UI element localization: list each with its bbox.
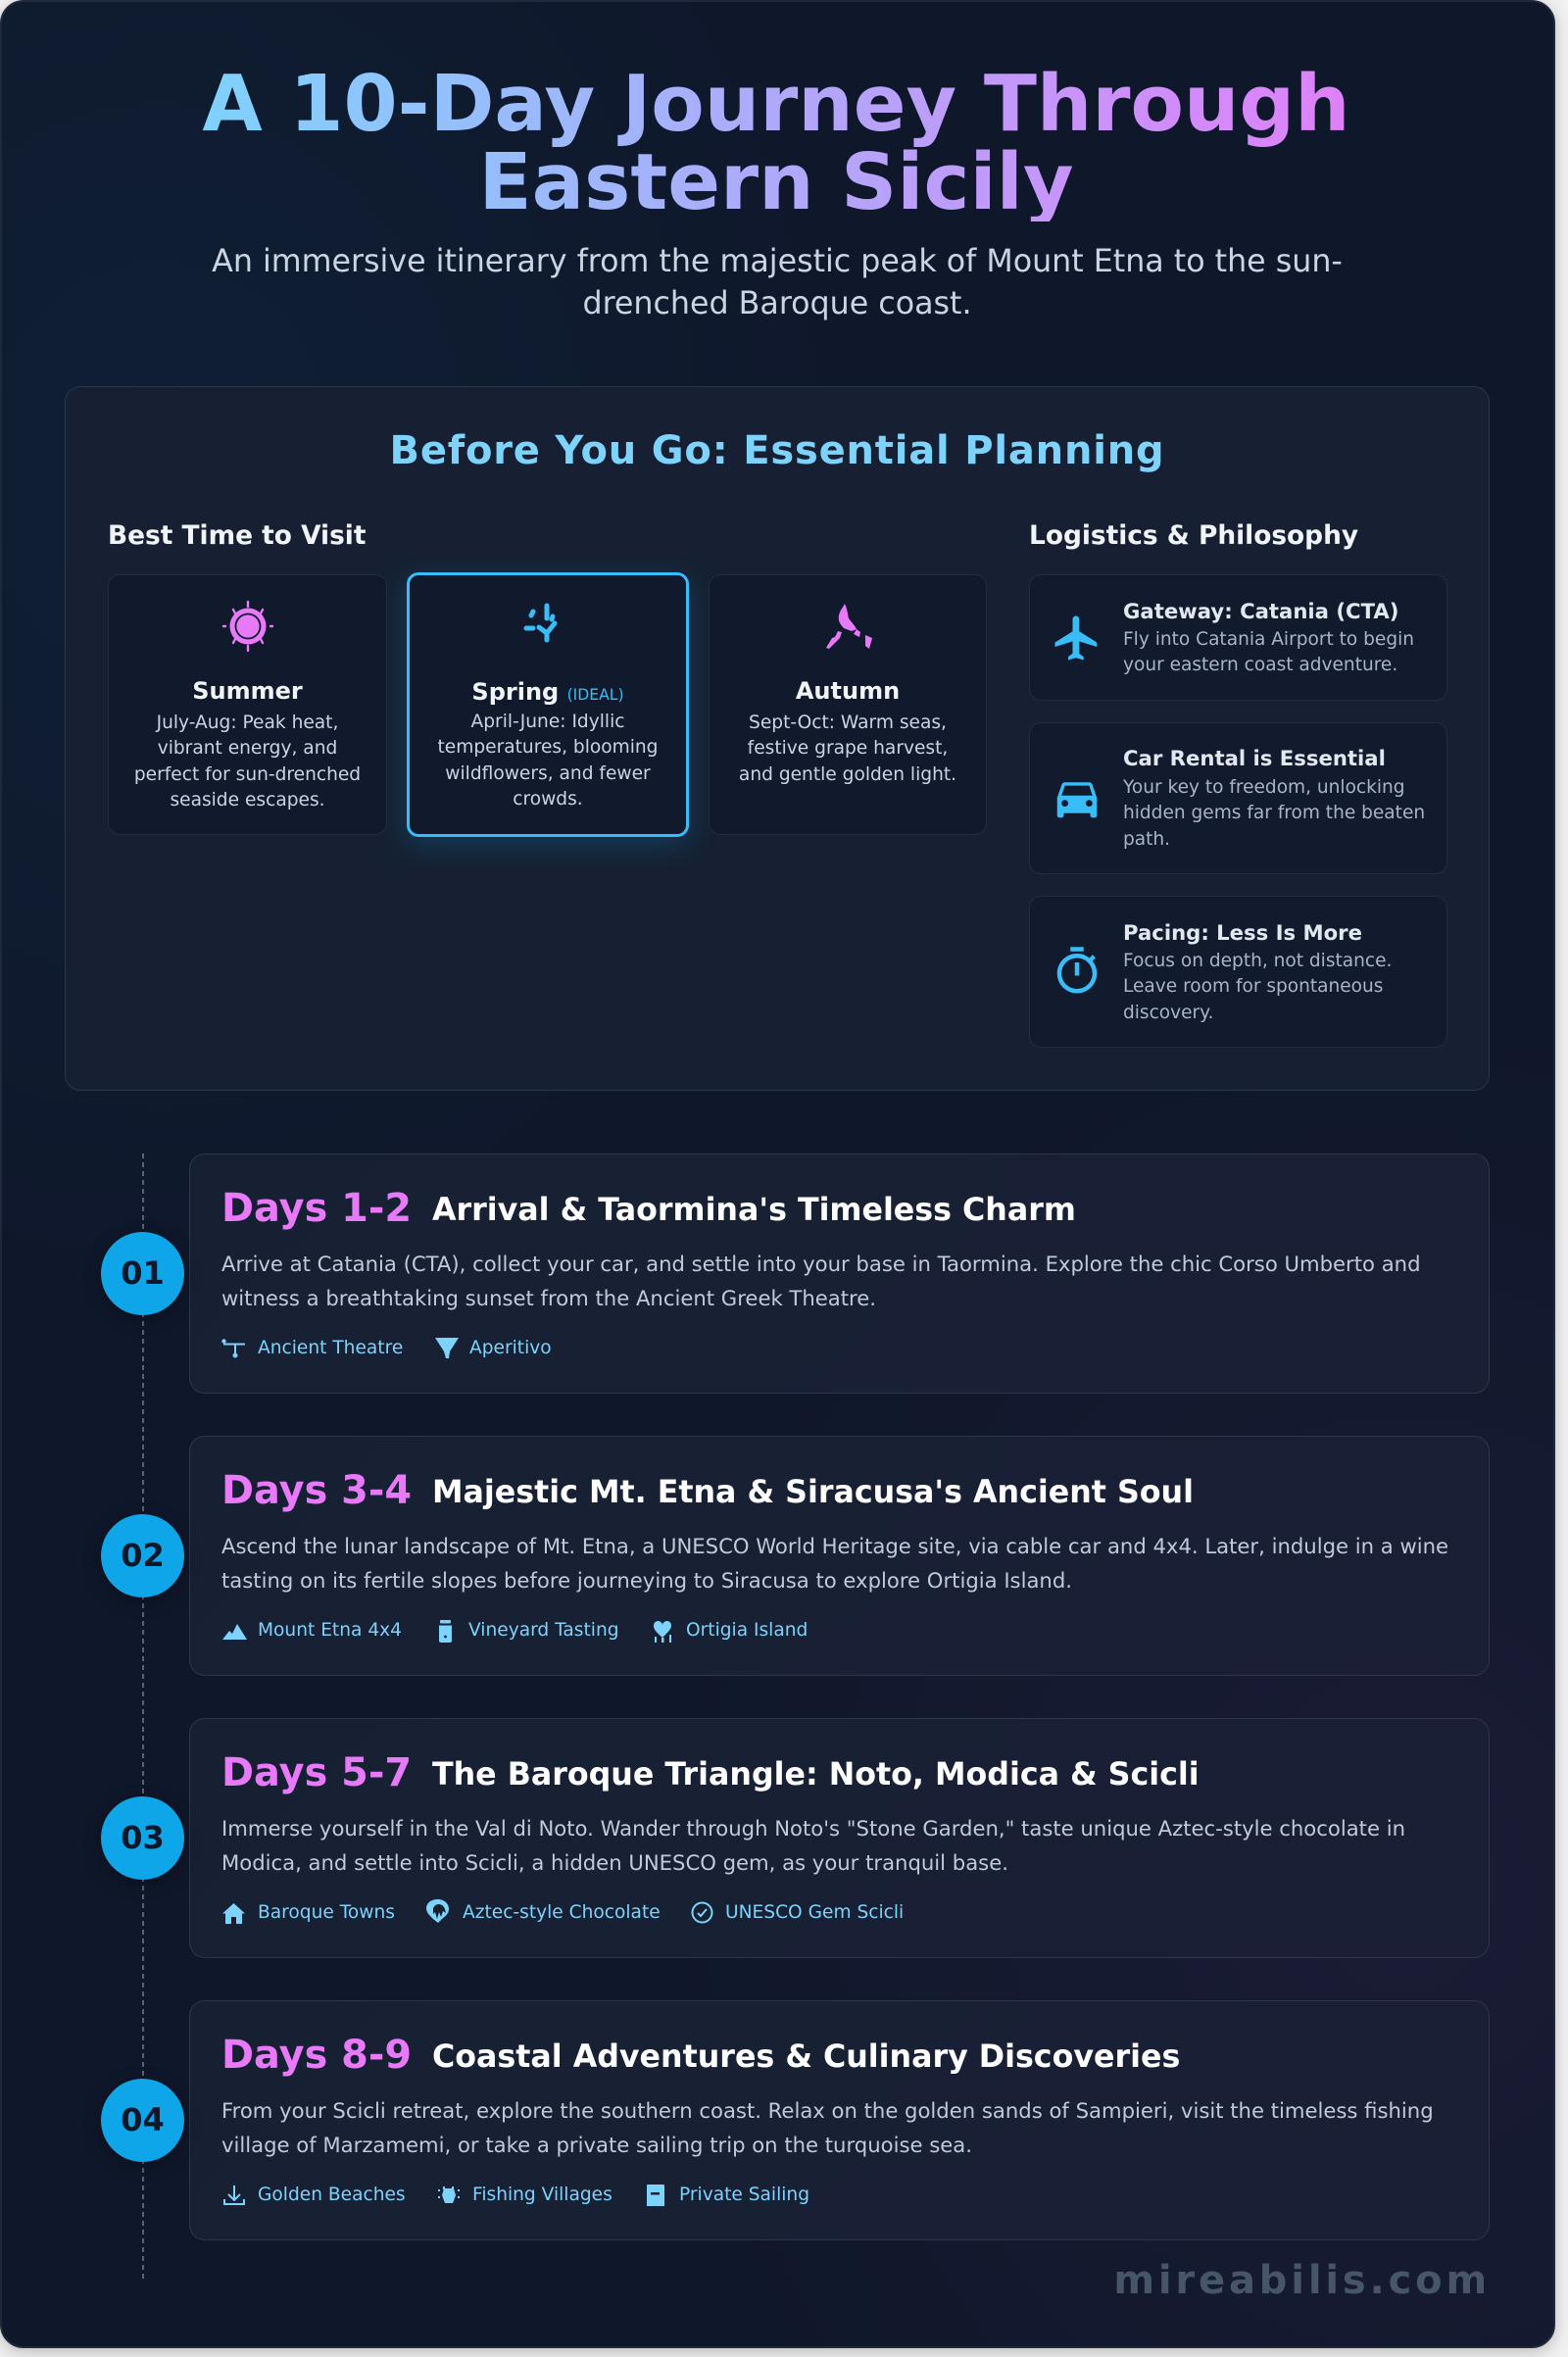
summer text: seaside escapes. xyxy=(170,790,325,810)
days 3-4 label: Days 3-4 xyxy=(221,1468,412,1513)
tag: ortigia island: Ortigia Island xyxy=(686,1620,808,1641)
pacing text: Leave room for spontaneous xyxy=(1123,976,1383,997)
car rental text: hidden gems far from the beaten xyxy=(1123,803,1425,823)
step number 01 xyxy=(101,1232,184,1315)
tag: unesco gem: UNESCO Gem Scicli xyxy=(725,1902,904,1923)
icon: chocolate xyxy=(426,1899,449,1923)
heading: logistics & philosophy: Logistics & Philosophy xyxy=(1029,520,1358,551)
spring text xyxy=(438,712,658,810)
card: pacing xyxy=(1029,896,1447,1048)
icon: bottle xyxy=(439,1620,452,1643)
tag: fishing villages: Fishing Villages xyxy=(472,2185,612,2205)
step number 01: 01 xyxy=(121,1254,165,1292)
icon: download beach xyxy=(223,2185,245,2205)
autumn heading: Autumn xyxy=(796,677,900,705)
tag: private sailing: Private Sailing xyxy=(679,2185,809,2205)
tag: ancient theatre: Ancient Theatre xyxy=(258,1338,403,1358)
panel: days 8-9 xyxy=(189,2000,1490,2240)
step number 03: 03 xyxy=(121,1819,165,1856)
spring text: temperatures, blooming xyxy=(438,737,658,758)
title xyxy=(98,65,1454,221)
days 1-2 text: Arrive at Catania (CTA), collect your car, and settle into your base in Taormina. Explore the chic Corso Umberto and xyxy=(221,1252,1421,1276)
days 1-2 text: witness a breathtaking sunset from the Ancient Greek Theatre. xyxy=(221,1286,876,1310)
summer text: perfect for sun-drenched xyxy=(134,764,361,785)
car rental text xyxy=(1123,777,1425,850)
autumn text: Sept-Oct: Warm seas, xyxy=(749,712,947,733)
icon: theatre xyxy=(221,1339,245,1358)
icon: sprout xyxy=(523,604,557,643)
icon: plane xyxy=(1054,615,1098,661)
icon: house xyxy=(222,1903,245,1924)
summer text xyxy=(134,712,361,810)
heading: best time to visit: Best Time to Visit xyxy=(108,520,366,551)
panel: before you go xyxy=(65,386,1490,1091)
icon: sun xyxy=(221,600,274,653)
tag: mount etna: Mount Etna 4x4 xyxy=(258,1620,402,1641)
autumn text xyxy=(739,712,956,785)
icon: crab xyxy=(438,2186,460,2203)
panel: days 5-7 xyxy=(189,1718,1490,1958)
subtitle: An immersive itinerary from the majestic peak of Mount Etna to the sun- xyxy=(212,244,1343,279)
card: autumn xyxy=(709,574,987,835)
days 1-2 text xyxy=(221,1252,1421,1310)
gateway text: your eastern coast adventure. xyxy=(1123,655,1397,675)
spring text: April-June: Idyllic xyxy=(471,712,624,732)
days 8-9 label: Days 8-9 xyxy=(221,2033,412,2078)
card: gateway xyxy=(1029,574,1447,701)
pacing heading: Pacing: Less Is More xyxy=(1123,920,1362,945)
days 5-7 text: Modica, and settle into Scicli, a hidden UNESCO gem, as your tranquil base. xyxy=(221,1850,1008,1875)
autumn text: and gentle golden light. xyxy=(739,764,956,785)
card: summer xyxy=(108,574,387,835)
car rental text: path. xyxy=(1123,829,1170,850)
gateway text: Fly into Catania Airport to begin xyxy=(1123,629,1414,650)
icon: timer xyxy=(1056,947,1098,994)
panel heading: Before You Go: Essential Planning xyxy=(390,428,1164,473)
tag: baroque towns: Baroque Towns xyxy=(258,1902,395,1923)
icon: heart island xyxy=(654,1621,671,1643)
gateway text xyxy=(1123,629,1414,675)
pacing text: discovery. xyxy=(1123,1003,1213,1023)
days 5-7 title: The Baroque Triangle: Noto, Modica & Scicli xyxy=(432,1757,1200,1792)
gateway heading: Gateway: Catania (CTA) xyxy=(1123,599,1398,623)
subtitle: drenched Baroque coast. xyxy=(582,286,972,321)
icon: check badge xyxy=(692,1901,713,1923)
days 3-4 text xyxy=(221,1534,1448,1593)
days 5-7 text: Immerse yourself in the Val di Noto. Wander through Noto's "Stone Garden," taste unique Aztec-style chocolate in xyxy=(221,1816,1405,1841)
tag: aperitivo: Aperitivo xyxy=(469,1338,552,1358)
days 3-4 text: Ascend the lunar landscape of Mt. Etna, a UNESCO World Heritage site, via cable car and 4x4. Later, indulge in a wine xyxy=(221,1534,1448,1558)
icon: aperitivo xyxy=(435,1338,459,1358)
car rental text: Your key to freedom, unlocking xyxy=(1123,777,1405,798)
panel: days 1-2 xyxy=(189,1154,1490,1394)
days 1-2 label: Days 1-2 xyxy=(221,1186,412,1231)
days 5-7 label: Days 5-7 xyxy=(221,1750,412,1795)
car rental heading: Car Rental is Essential xyxy=(1123,746,1386,770)
spring text: wildflowers, and fewer xyxy=(445,763,651,784)
days 8-9 text: From your Scicli retreat, explore the southern coast. Relax on the golden sands of Sampieri, visit the timeless fishing xyxy=(221,2098,1434,2123)
card: spring (ideal) xyxy=(407,572,689,837)
card: car rental xyxy=(1029,722,1447,874)
step number 02: 02 xyxy=(121,1537,165,1574)
icon: car xyxy=(1056,782,1098,817)
autumn text: festive grape harvest, xyxy=(748,738,948,759)
watermark: mireabilis.com xyxy=(1113,2258,1491,2303)
days 3-4 title: Majestic Mt. Etna & Siracusa's Ancient Soul xyxy=(432,1475,1194,1510)
spring heading: Spring (IDEAL) xyxy=(471,678,624,706)
days 1-2 title: Arrival & Taormina's Timeless Charm xyxy=(432,1193,1076,1228)
days 3-4 text: tasting on its fertile slopes before journeying to Siracusa to explore Ortigia Island. xyxy=(221,1568,1072,1593)
step number 04: 04 xyxy=(121,2101,165,2138)
subtitle xyxy=(212,244,1343,321)
summer heading: Summer xyxy=(192,677,303,705)
panel: days 3-4 xyxy=(189,1436,1490,1676)
days 5-7 text xyxy=(221,1816,1405,1875)
step number 02 xyxy=(101,1514,184,1597)
tag: golden beaches: Golden Beaches xyxy=(258,2185,406,2205)
pacing text: Focus on depth, not distance. xyxy=(1123,951,1392,971)
timeline line xyxy=(142,1154,144,2283)
days 8-9 text xyxy=(221,2098,1434,2157)
title: A 10-Day Journey Through xyxy=(202,58,1350,149)
summer text: vibrant energy, and xyxy=(158,738,337,759)
title: Eastern Sicily xyxy=(478,136,1074,227)
tag: vineyard tasting: Vineyard Tasting xyxy=(468,1620,619,1641)
pacing text xyxy=(1123,951,1392,1023)
icon: leaf xyxy=(826,604,872,649)
step number 03 xyxy=(101,1796,184,1880)
days 8-9 title: Coastal Adventures & Culinary Discoveries xyxy=(432,2039,1180,2075)
days 8-9 text: village of Marzamemi, or take a private sailing trip on the turquoise sea. xyxy=(221,2133,972,2157)
icon: sail card xyxy=(647,2185,664,2206)
tag: aztec chocolate: Aztec-style Chocolate xyxy=(463,1902,661,1923)
summer text: July-Aug: Peak heat, xyxy=(157,712,338,733)
spring text: crowds. xyxy=(513,789,583,810)
icon: mountain xyxy=(222,1624,247,1640)
step number 04 xyxy=(101,2079,184,2162)
